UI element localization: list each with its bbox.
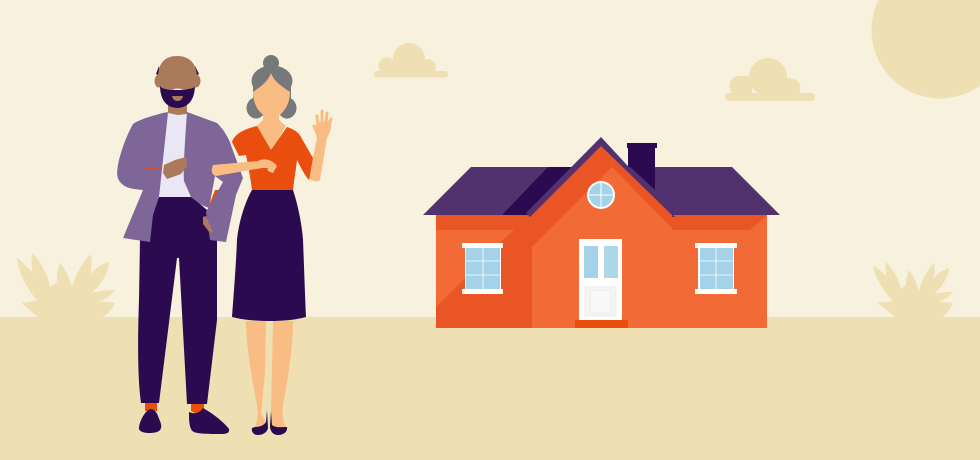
woman hair back	[246, 55, 296, 118]
woman hand fingers	[314, 111, 331, 133]
woman neck and chest	[257, 112, 286, 152]
plant right	[873, 262, 953, 317]
man mouth	[172, 96, 183, 101]
woman skirt	[232, 190, 306, 321]
man	[117, 56, 277, 434]
man ears	[154, 74, 200, 88]
woman shoes	[252, 410, 287, 435]
orange accent stroke	[137, 166, 162, 170]
man beard	[160, 84, 195, 108]
roof shadow	[502, 167, 572, 215]
cloud left	[374, 43, 448, 78]
man right hand	[203, 216, 213, 233]
house	[423, 137, 780, 328]
sun	[872, 0, 980, 98]
house wall	[436, 215, 767, 328]
eave shadow right	[672, 215, 767, 230]
round window	[587, 181, 615, 209]
woman face	[253, 73, 290, 118]
woman legs	[246, 321, 293, 427]
ground	[0, 317, 980, 460]
man hair	[156, 66, 199, 76]
man head	[158, 56, 197, 90]
left window	[462, 243, 503, 294]
plant left	[17, 253, 115, 317]
door	[579, 239, 622, 320]
orange dress accent	[208, 190, 220, 209]
woman right arm	[309, 120, 331, 181]
eave shadow left	[436, 215, 532, 230]
main roof	[423, 167, 780, 215]
man jacket right	[184, 112, 243, 242]
gable light	[532, 167, 672, 328]
cloud right	[725, 58, 815, 101]
gable wall	[532, 146, 672, 328]
man left hand	[163, 157, 187, 179]
man neck	[168, 103, 187, 116]
woman blouse	[232, 126, 313, 190]
wall shadow	[436, 215, 532, 328]
door step	[575, 320, 628, 328]
man jacket	[117, 112, 168, 242]
background sky	[0, 0, 980, 317]
chimney	[627, 143, 657, 197]
man shoes	[139, 408, 229, 434]
right window	[695, 243, 737, 294]
chimney front	[628, 148, 655, 190]
woman	[232, 55, 331, 435]
woman left arm	[212, 159, 277, 176]
man socks	[145, 403, 204, 414]
man shirt	[159, 113, 192, 197]
gable roof	[526, 137, 675, 217]
man trousers	[138, 197, 217, 404]
